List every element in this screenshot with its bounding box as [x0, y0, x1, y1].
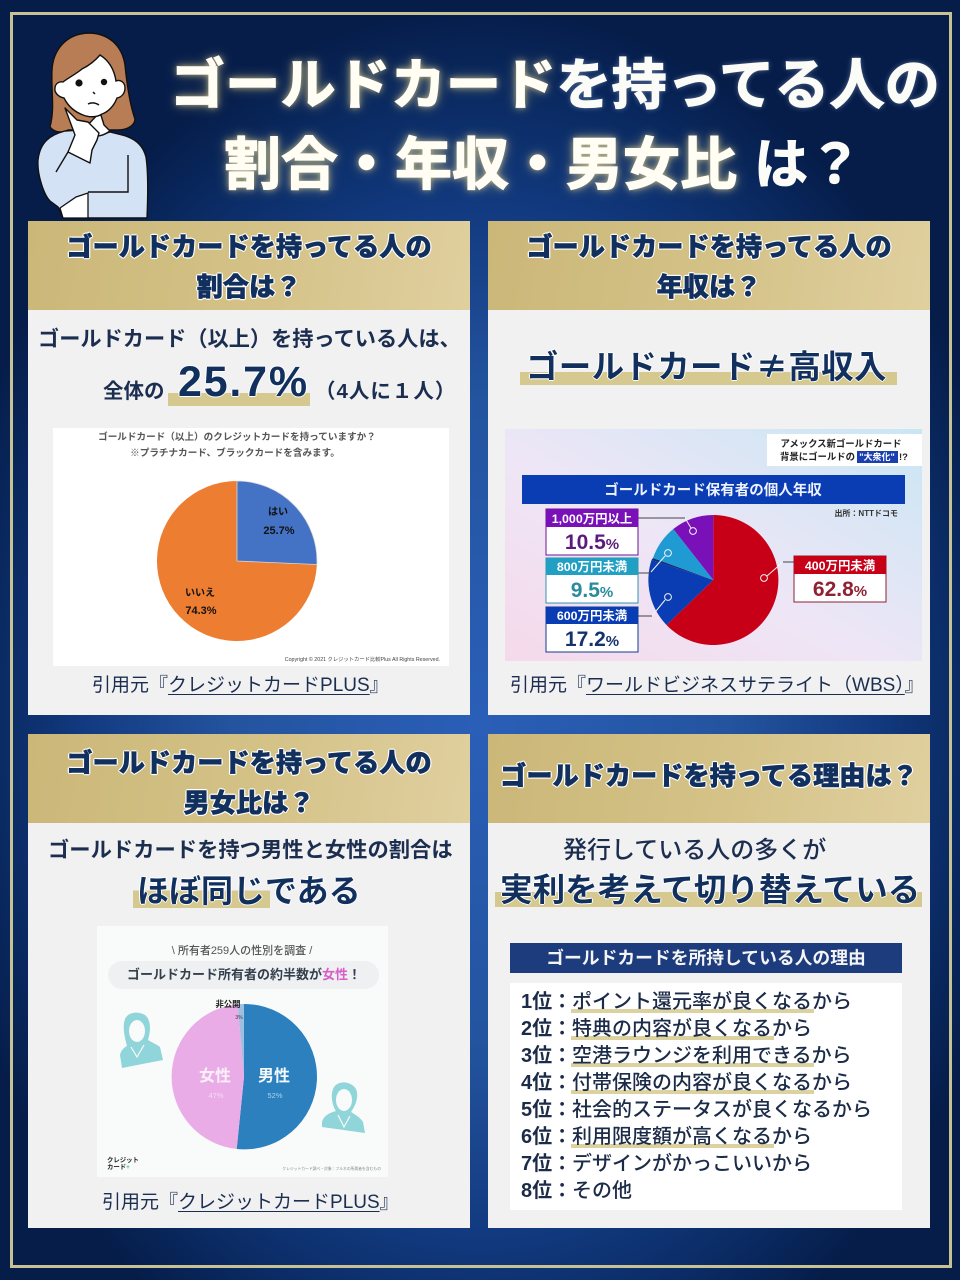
panel header: reasons: ゴールドカードを持ってる理由は？: [500, 761, 918, 791]
chart: income pie: !?: [899, 451, 908, 462]
chart: income pie: 1,000万円以上: [552, 512, 632, 526]
table heading: [510, 943, 902, 973]
chart: yes no pie: 25.7%: [263, 525, 295, 537]
highlight: 25.7%: [168, 393, 310, 406]
chart: gender pie: カード+: [107, 1163, 130, 1171]
panel header: share: [28, 221, 470, 310]
text: reasons intro: 発行している人の多くが: [563, 837, 826, 864]
chart: income pie: 9.5%: [571, 579, 613, 602]
chart: yes no pie: いいえ: [185, 587, 215, 599]
chart: income pie: 800万円未満: [557, 559, 627, 574]
text: share intro: ゴールドカード（以上）を持っている人は、: [38, 328, 461, 351]
reason 1: ポイント還元率が良くなるから: [572, 991, 852, 1013]
citation: WBS: 引用元『ワールドビジネスサテライト（WBS）』: [510, 675, 924, 696]
panel header: income: [488, 221, 930, 310]
text: 25.7 percent line: [103, 358, 456, 406]
chart: gender pie: クレジット: [107, 1155, 139, 1164]
chart: income pie: 400万円未満: [805, 558, 875, 573]
reason 4: 4位：: [521, 1072, 572, 1094]
panel header: share: ゴールドカードを持ってる人の: [66, 232, 432, 262]
title: [170, 50, 940, 197]
reason 5: 5位：: [521, 1099, 572, 1121]
text: switching for practical benefit: 実利を考えて切り替えている: [500, 871, 920, 908]
chart: yes no pie: 74.3%: [185, 605, 217, 617]
chart: income pie: 17.2%: [565, 628, 619, 651]
chart: income pie: 10.5%: [565, 531, 619, 554]
reason 4: 付帯保険の内容が良くなるから: [572, 1072, 852, 1094]
reason 7: 7位：: [521, 1153, 572, 1175]
reasons list: [510, 983, 902, 1210]
table heading: ゴールドカードを所持している人の理由: [546, 948, 866, 968]
text: 25.7 percent line: （4人に１人）: [315, 380, 456, 403]
chart: income pie: アメックス新ゴールドカード: [780, 438, 902, 449]
reason 5: 社会的ステータスが良くなるから: [572, 1099, 872, 1121]
panel header: gender: [28, 734, 470, 823]
citation: credit card plus: 引用元『クレジットカードPLUS』: [92, 675, 389, 696]
chart: income pie: [505, 429, 922, 661]
highlight: switching: [495, 892, 922, 907]
label 1000: [546, 509, 638, 555]
icon: man: [322, 1082, 365, 1133]
chart: gender pie: 非公開: [215, 999, 241, 1009]
chart: gender pie: クレジットカード調べ・対象：フルネの所属者を含むもの: [282, 1166, 381, 1171]
chart: gender pie: 3%: [235, 1015, 243, 1021]
chart: yes no pie: ゴールドカード（以上）のクレジットカードを持っていますか？: [98, 431, 376, 443]
title: ゴールドカードを持ってる人の: [170, 54, 940, 116]
text: 25.7 percent line: 25.7%: [178, 358, 309, 406]
panel header: gender: 男女比は？: [184, 788, 314, 818]
reason 3: 空港ラウンジを利用できるから: [572, 1045, 852, 1067]
chart: gender pie: 52%: [267, 1091, 283, 1100]
title: 割合・年収・男女比: [224, 133, 737, 197]
reason 2: 特典の内容が良くなるから: [572, 1018, 812, 1040]
panel header: gender: ゴールドカードを持ってる人の: [66, 748, 432, 778]
panel header: share: 割合は？: [197, 272, 301, 302]
chart: yes no pie: はい: [268, 506, 288, 518]
chart: yes no pie: ※プラチナカード、ブラックカードを含みます。: [130, 447, 340, 459]
chart: gender pie: [97, 926, 388, 1177]
chart: income pie: 背景にゴールドの: [780, 451, 855, 462]
chart: gender pie: 男性: [258, 1066, 290, 1085]
panel header: reasons: [488, 734, 930, 823]
reason 8: [521, 1180, 632, 1202]
citation: credit card plus 2: 引用元『クレジットカードPLUS』: [102, 1192, 399, 1213]
chart: gender pie: \ 所有者259人の性別を調査 /: [172, 943, 313, 957]
panel: share of holders: [28, 221, 470, 715]
chart: yes no pie: [53, 428, 449, 666]
text: gender intro: ゴールドカードを持つ男性と女性の割合は: [48, 838, 453, 862]
panel header: income: ゴールドカードを持ってる人の: [526, 232, 892, 262]
text: almost the same: ほぼ同じである: [137, 873, 361, 909]
text: not high income: ゴールドカード≠高収入: [526, 341, 887, 388]
panel: annual income: [488, 221, 930, 715]
icon: thinking woman: [37, 32, 148, 219]
chart: income pie: "大衆化": [859, 451, 895, 462]
reason 8: 8位：: [521, 1180, 572, 1202]
chart: income pie: 出所：NTTドコモ: [834, 508, 898, 518]
reason 6: 利用限度額が高くなるから: [572, 1126, 812, 1148]
reason 7: デザインがかっこいいから: [572, 1153, 812, 1175]
panel: reasons: [488, 734, 930, 1228]
chart: gender pie: ゴールドカード所有者の約半数が女性！: [127, 967, 361, 982]
chart: gender pie: 47%: [208, 1091, 224, 1100]
reason 2: 2位：: [521, 1018, 572, 1040]
chart: income pie: 600万円未満: [557, 608, 627, 623]
highlight: not high income: [520, 372, 897, 385]
panel: gender ratio: [28, 734, 470, 1228]
reason 6: 6位：: [521, 1126, 572, 1148]
chart: gender pie: 女性: [199, 1066, 231, 1085]
title: は？: [754, 135, 862, 195]
highlight: almost the same: [133, 883, 270, 908]
chart: income pie: ゴールドカード保有者の個人年収: [604, 481, 822, 499]
panel header: income: 年収は？: [657, 272, 761, 302]
chart: income pie: 62.8%: [813, 578, 867, 601]
reason 8: その他: [572, 1180, 632, 1202]
reason 1: 1位：: [521, 991, 572, 1013]
chart: yes no pie: Copyright © 2021 クレジットカード比較Plus All Rights Reserved.: [285, 655, 440, 663]
text: 25.7 percent line: 全体の: [103, 380, 164, 403]
reason 3: 3位：: [521, 1045, 572, 1067]
icon: woman: [120, 1013, 163, 1068]
